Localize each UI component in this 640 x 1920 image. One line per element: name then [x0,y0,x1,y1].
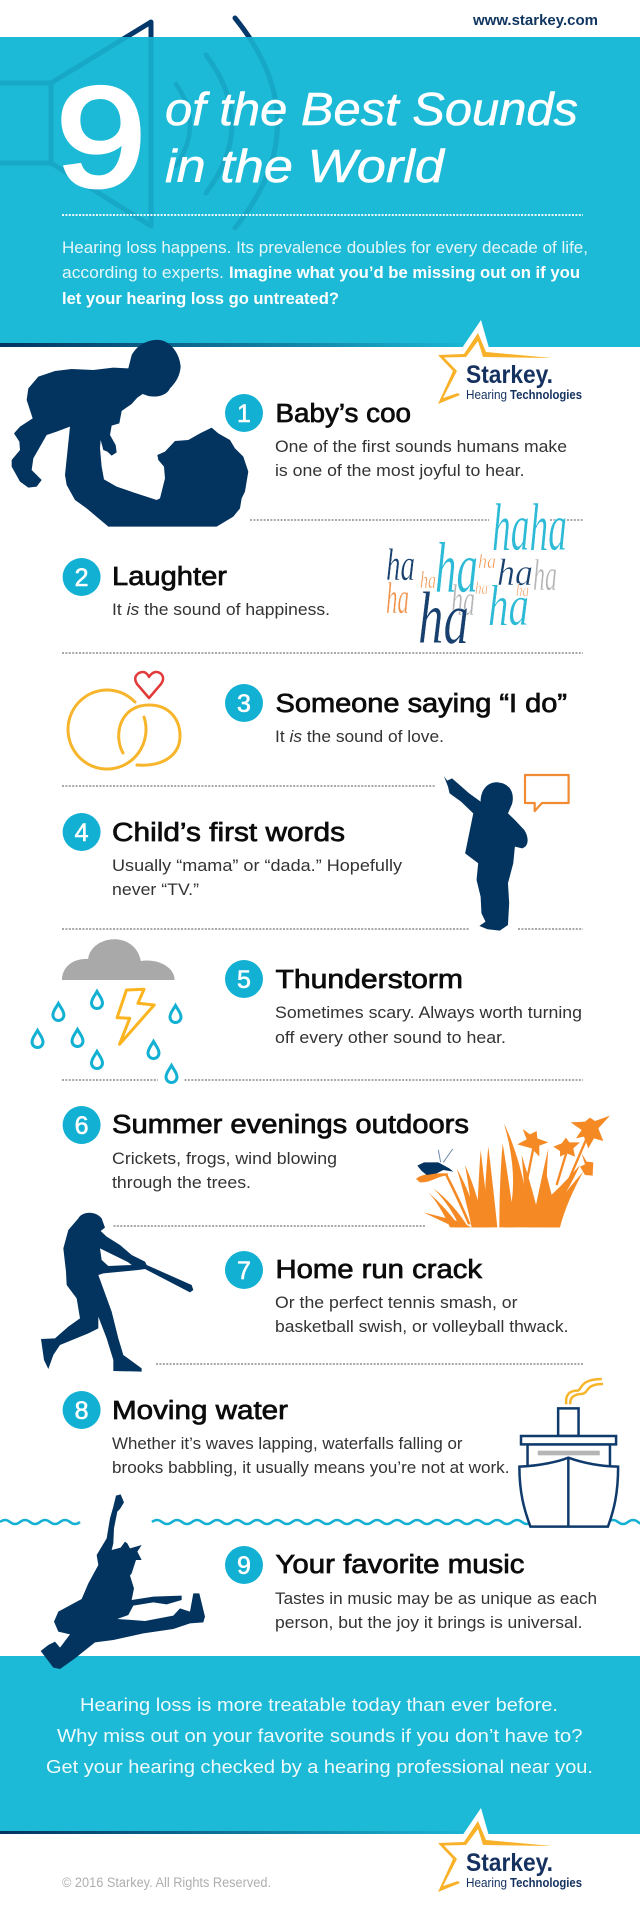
intro text: Imagine what you’d be missing out on if you [229,264,580,282]
number badge 7: 7 [237,1257,251,1285]
lightning bolt [117,989,154,1044]
illustration: handwritten ha ha: haha [492,489,567,565]
description 2: It is the sound of happiness. [112,601,330,619]
number badge 7 [225,1251,263,1289]
footer text: Why miss out on your favorite sounds if you don’t have to? [57,1725,582,1746]
intro text [62,239,588,308]
illustration: handwritten ha ha: ha [488,573,529,638]
title: of the Best Sounds [165,83,578,135]
number badge 2 [63,558,101,596]
grass and flowers [416,1116,610,1227]
heading 6: Summer evenings outdoors [112,1111,469,1139]
logo: Starkey bottom: Technologies [510,1876,582,1890]
waves [0,1520,640,1524]
illustration: handwritten ha ha: ha [475,578,488,598]
logo: Starkey bottom [438,1808,582,1892]
footer panel [0,1656,640,1834]
heading 1: Baby’s coo [276,400,411,428]
rain drops [32,992,181,1082]
number badge 8 [63,1391,101,1429]
number badge 3 [225,684,263,722]
illustration: handwritten ha ha: ha [497,552,533,594]
illustration: handwritten ha ha: ha [478,551,496,573]
number badge 1 [225,394,263,432]
number badge 9: 9 [237,1552,251,1580]
item 8: moving water [63,1391,509,1477]
illustration: handwritten ha ha: ha [386,574,409,623]
description 7: basketball swish, or volleyball thwack. [275,1318,568,1336]
illustration: handwritten ha ha: ha [420,568,436,594]
illustration: handwritten ha ha: ha [451,576,475,625]
item 6: summer evenings outdoors [63,1106,469,1192]
item 1: baby's coo [225,394,567,480]
logo: Starkey bottom: Starkey. [466,1849,553,1877]
description 4 [112,857,403,899]
description 8: Whether it’s waves lapping, waterfalls falling or [112,1435,463,1453]
number badge 8: 8 [75,1397,89,1425]
logo: Starkey bottom: Hearing [466,1876,507,1890]
copyright: © 2016 Starkey. All Rights Reserved. [62,1875,271,1890]
icon: storm cloud with rain and lightning [32,939,181,1082]
icon: dancer silhouette [41,1494,205,1669]
heading 7: Home run crack [276,1256,482,1284]
number badge 9 [225,1546,263,1584]
description 5: Sometimes scary. Always worth turning [275,1004,582,1022]
description 4: never “TV.” [112,881,199,899]
logo: Starkey top: Hearing [466,388,507,402]
item 7: home run crack [225,1251,568,1336]
description 6: through the trees. [112,1174,251,1192]
heading 4: Child’s first words [112,819,345,847]
illustration: handwritten ha ha: ha [435,528,478,608]
heading 5: Thunderstorm [276,966,463,994]
description 8 [112,1435,509,1477]
icon: baseball batter silhouette [41,1213,193,1372]
description 9 [275,1590,597,1632]
website url: www.starkey.com [472,13,598,29]
number badge 1: 1 [237,400,251,428]
icon: wedding rings with heart [68,672,180,769]
description 5: off every other sound to hear. [275,1029,506,1047]
description 8: brooks babbling, it usually means you’re not at work. [112,1459,509,1477]
description 9: Tastes in music may be as unique as each [275,1590,597,1608]
description 7 [275,1294,568,1336]
cloud [62,939,175,980]
icon: ship [519,1379,618,1527]
title numeral: 9 [56,58,146,217]
icon: speech bubble [525,775,569,811]
description 9: person, but the joy it brings is universal. [275,1614,582,1632]
heading 2: Laughter [112,563,228,591]
heading 8: Moving water [112,1397,289,1425]
icon: child pointing silhouette [444,776,528,931]
description 6 [112,1150,337,1192]
icon: parent lifting baby silhouette [12,340,248,527]
item 5: thunderstorm [225,960,582,1047]
description 1 [275,438,567,480]
number badge 4: 4 [75,819,89,847]
number badge 2: 2 [75,564,89,592]
item 4: child's first words [63,813,403,899]
description 7: Or the perfect tennis smash, or [275,1294,518,1312]
footer text: Get your hearing checked by a hearing professional near you. [46,1756,593,1777]
intro text: let your hearing loss go untreated? [62,290,339,308]
title: in the World [165,140,446,192]
description 6: Crickets, frogs, wind blowing [112,1150,337,1168]
number badge 5: 5 [237,966,251,994]
title [165,83,578,192]
header panel [0,18,640,347]
item 2: laughter [63,558,330,619]
item 3: someone saying I do [225,684,567,746]
footer text: Hearing loss is more treatable today than ever before. [80,1694,558,1715]
logo: Starkey top: Technologies [510,388,582,402]
description 4: Usually “mama” or “dada.” Hopefully [112,857,403,875]
item 9: your favorite music [225,1546,597,1632]
number badge 6: 6 [75,1112,89,1140]
intro text: according to experts. [62,264,224,282]
intro text: Hearing loss happens. Its prevalence doubles for every decade of life, [62,239,588,257]
illustration: handwritten ha ha: ha [533,551,557,600]
description 5 [275,1004,582,1047]
number badge 3: 3 [237,690,251,718]
illustration: handwritten ha ha: ha [516,580,529,600]
cricket [417,1149,453,1175]
icon: heart [135,672,163,698]
logo: Starkey top: Starkey. [466,361,553,389]
description 3: It is the sound of love. [275,728,444,746]
heading 9: Your favorite music [276,1551,525,1579]
icon: speaker with sound waves [0,18,278,228]
illustration: handwritten ha ha: ha [418,578,469,660]
smoke [566,1379,603,1404]
illustration: handwritten ha ha: ha [386,539,415,590]
footer text [46,1694,593,1777]
description 1: is one of the most joyful to hear. [275,462,524,480]
illustration: cricket on orange grass and flowers [416,1116,610,1227]
number badge 4 [63,813,101,851]
number badge 5 [225,960,263,998]
description 1: One of the first sounds humans make [275,438,567,456]
heading 3: Someone saying “I do” [276,690,567,718]
number badge 6 [63,1106,101,1144]
illustration: handwritten ha ha [386,489,567,660]
logo: Starkey top [438,320,582,404]
